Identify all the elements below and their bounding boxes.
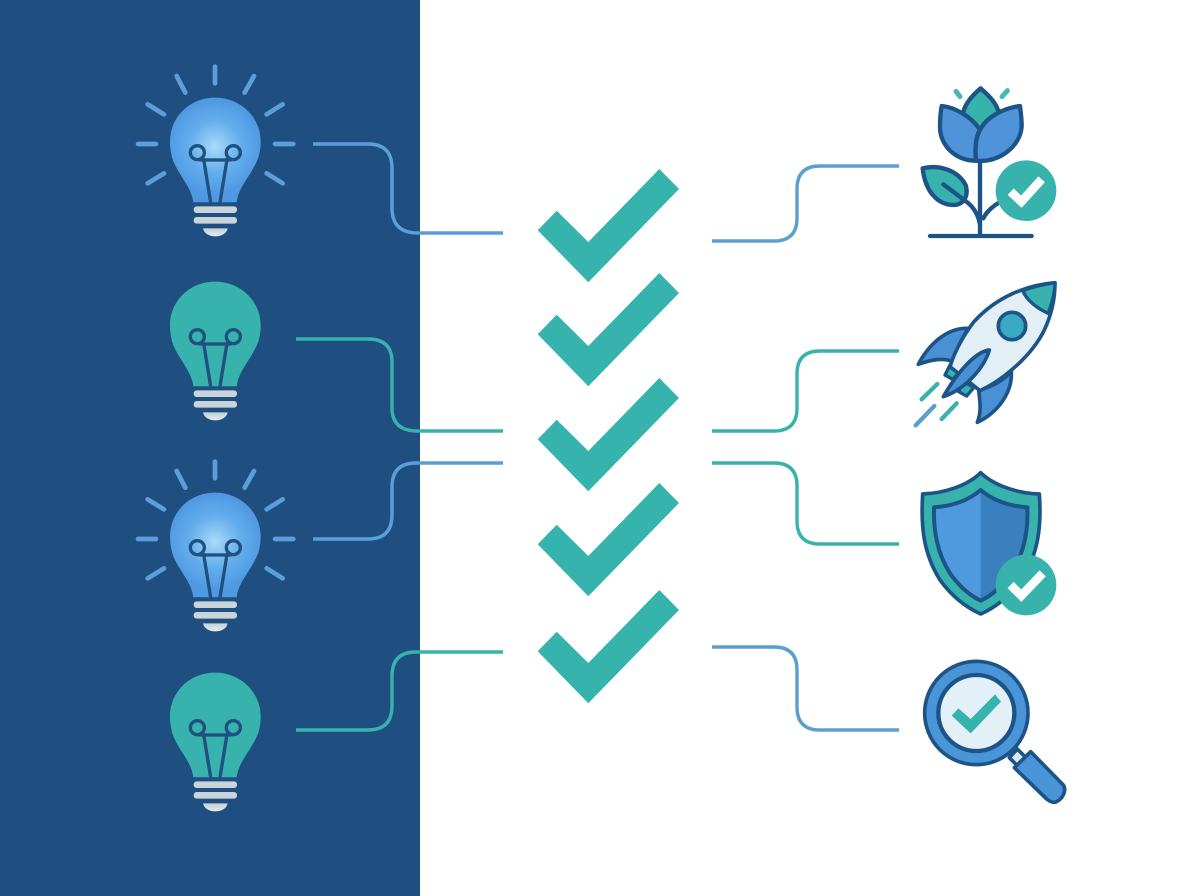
icon: glowing blue light bulb 1 (138, 67, 293, 236)
column of five teal check marks (538, 169, 679, 703)
icon: glowing blue light bulb 3 (138, 462, 293, 631)
icon: magnifying glass with check (925, 661, 1065, 802)
icon: tulip growth with check badge (923, 88, 1056, 236)
icon: teal light bulb 4 (170, 673, 261, 811)
icon: rocket launching (916, 283, 1055, 425)
connectors: bulbs to checks (296, 144, 503, 730)
panel: navy left background (0, 0, 420, 896)
connectors: checks to outcomes (712, 166, 899, 730)
icon: teal light bulb 2 (170, 282, 261, 420)
icon: shield with check badge (922, 473, 1056, 615)
